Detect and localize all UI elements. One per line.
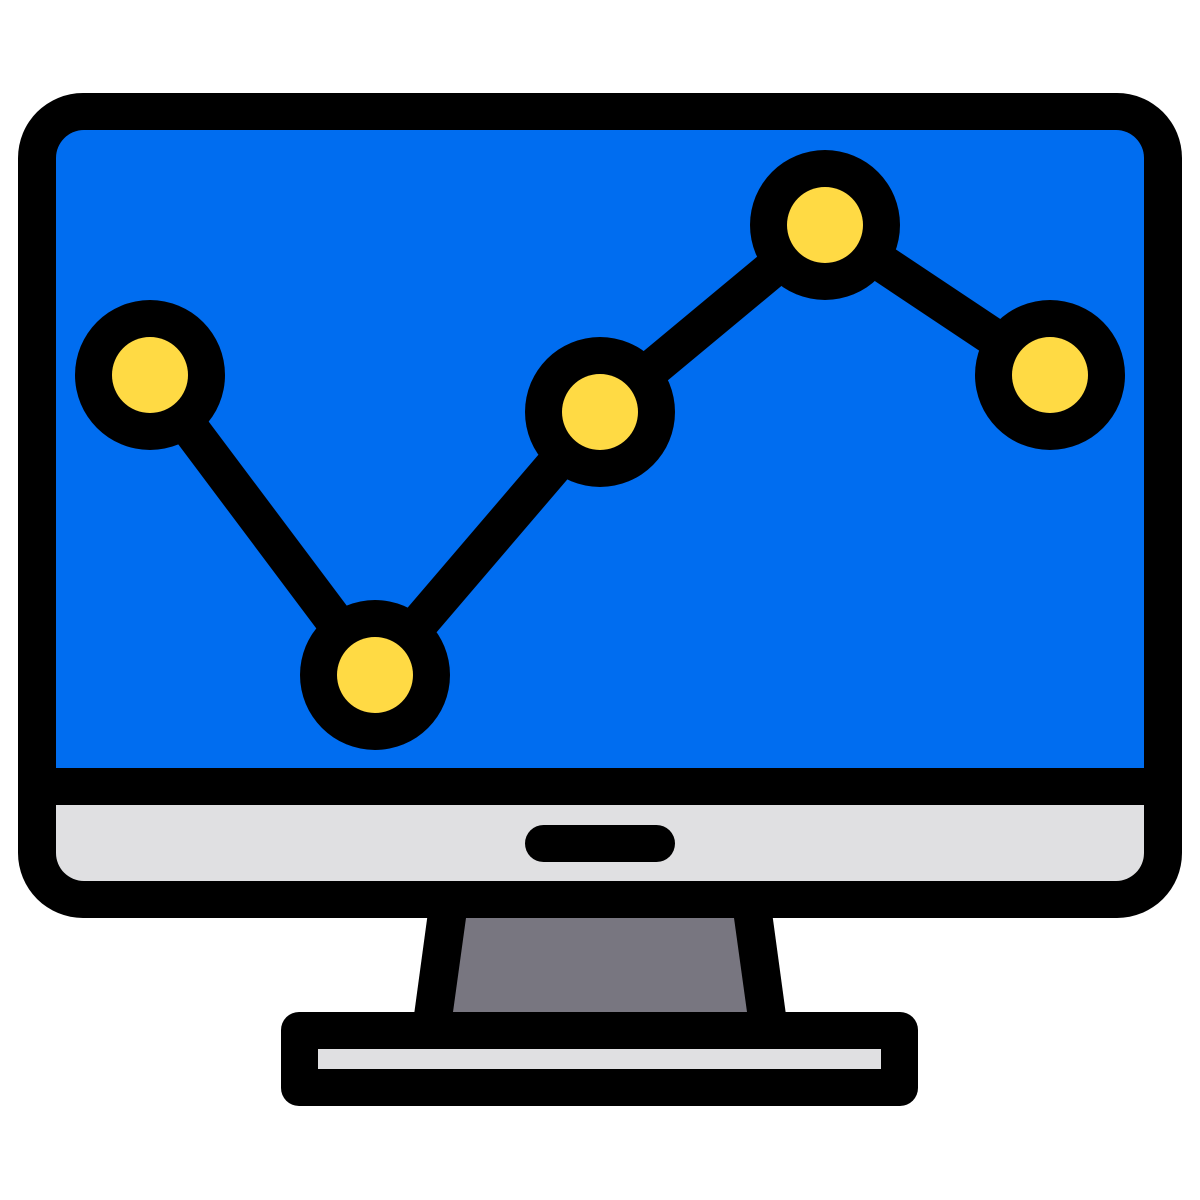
data point 4 — [750, 150, 900, 300]
bottom bezel — [56, 805, 1144, 881]
data point 3 — [525, 337, 675, 487]
screen — [56, 130, 1144, 768]
monitor stand base — [281, 1012, 918, 1106]
data point 5 — [975, 300, 1125, 450]
monitor stand neck — [414, 912, 786, 1015]
line chart — [75, 150, 1125, 750]
data point 2 — [300, 600, 450, 750]
power button — [525, 825, 675, 862]
monitor frame — [18, 93, 1182, 918]
data point 1 — [75, 300, 225, 450]
